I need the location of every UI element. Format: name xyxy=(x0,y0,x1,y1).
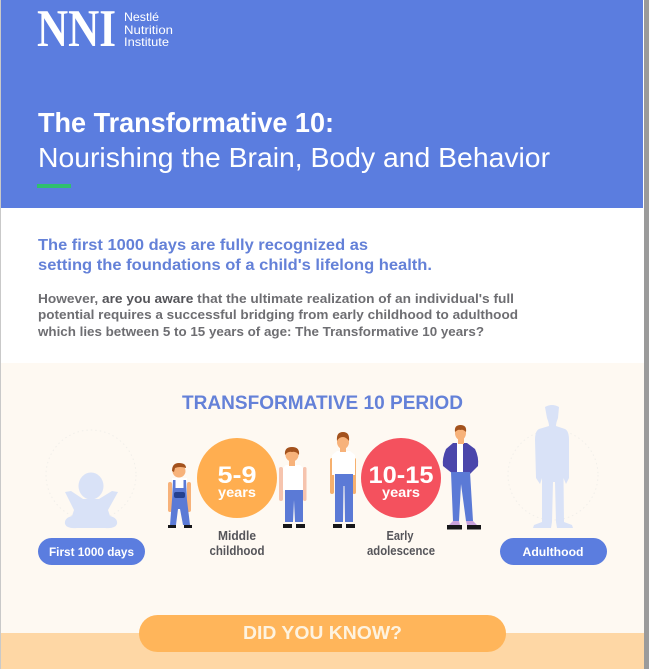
title: The Transformative 10: xyxy=(38,107,334,138)
logo: Nestlé Nutrition Institute: Nutrition xyxy=(124,23,173,37)
did you know banner: DID YOU KNOW? xyxy=(243,623,402,643)
label: early adolescence: Early xyxy=(386,529,414,543)
badge: 10-15 years: years xyxy=(382,484,420,500)
bottom band xyxy=(1,633,644,669)
label: early adolescence: adolescence xyxy=(367,544,435,558)
logo: Nestlé Nutrition Institute: Institute xyxy=(124,35,169,49)
panel: transformative 10 period xyxy=(1,363,644,633)
pill: first 1000 days xyxy=(38,538,145,565)
pill: adulthood xyxy=(500,538,607,565)
icon: teenager in jacket xyxy=(443,425,481,530)
logo: Nestlé Nutrition Institute: Nestlé xyxy=(124,10,159,24)
intro heading: The first 1000 days are fully recognized as xyxy=(38,237,368,254)
did you know banner xyxy=(139,615,506,652)
title: Nourishing the Brain, Body and Behavior xyxy=(38,142,550,173)
title xyxy=(38,107,550,173)
green accent bar xyxy=(37,184,71,188)
badge: 5-9 years xyxy=(197,438,277,518)
badge: 5-9 years: years xyxy=(218,484,256,500)
intro heading: setting the foundations of a child's lifelong health. xyxy=(38,257,432,274)
pill: first 1000 days: First 1000 days xyxy=(49,545,134,559)
intro heading xyxy=(38,237,432,274)
icon: older child xyxy=(279,447,306,528)
icon: young teen xyxy=(330,432,356,528)
intro paragraph xyxy=(37,291,518,339)
logo: Nestlé Nutrition Institute: NNI xyxy=(37,0,116,58)
label: middle childhood xyxy=(210,529,264,558)
badge: 5-9 years: 5-9 xyxy=(218,462,256,489)
icon: adult silhouette xyxy=(508,405,598,528)
pill: adulthood: Adulthood xyxy=(522,545,584,559)
icon: baby silhouette xyxy=(46,430,136,528)
badge: 10-15 years: 10-15 xyxy=(368,462,434,489)
label: early adolescence xyxy=(367,529,435,558)
label: middle childhood: Middle xyxy=(218,529,256,543)
header panel xyxy=(1,0,643,208)
intro paragraph: which lies between 5 to 15 years of age: The Transformative 10 years? xyxy=(37,324,484,339)
badge: 10-15 years xyxy=(361,438,441,518)
label: middle childhood: childhood xyxy=(210,544,264,558)
intro paragraph: potential requires a successful bridging from early childhood to adulthood xyxy=(38,307,518,322)
icon: boy in overalls xyxy=(168,463,192,528)
intro paragraph: However, are you aware that the ultimate realization of an individual's full xyxy=(38,291,514,306)
section heading: TRANSFORMATIVE 10 PERIOD xyxy=(182,393,463,414)
